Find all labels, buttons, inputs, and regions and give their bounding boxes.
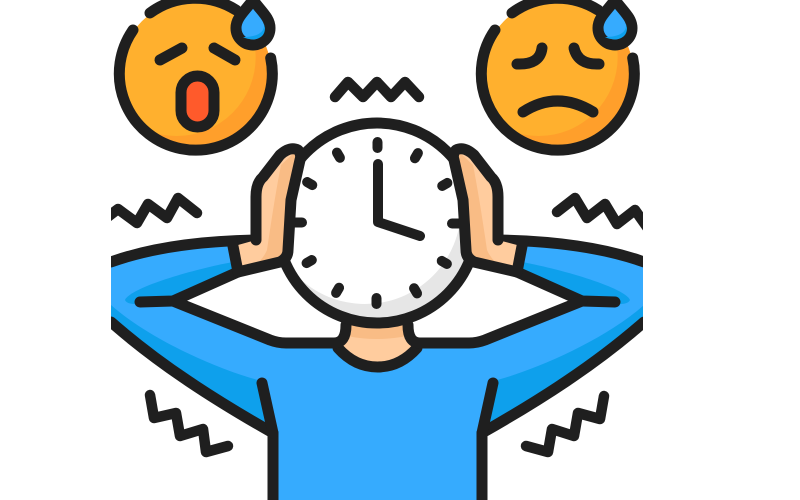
icon: person body and sleeves <box>111 241 644 500</box>
clock hands <box>378 164 420 236</box>
icon: stress squiggles <box>105 82 647 452</box>
illustration: stressed person holding a clock <box>111 0 643 500</box>
icon: clock <box>269 112 477 323</box>
icon: left hand <box>232 149 301 272</box>
icon: sweat drop right <box>598 0 632 45</box>
icon: arm outlines <box>111 240 644 500</box>
icon: neck <box>338 318 417 367</box>
icon: sad emoji <box>460 0 634 151</box>
icon: sweat drop left <box>236 0 270 45</box>
icon: shocked emoji <box>98 0 272 151</box>
clock ticks <box>294 142 460 304</box>
icon: right hand <box>453 149 523 272</box>
